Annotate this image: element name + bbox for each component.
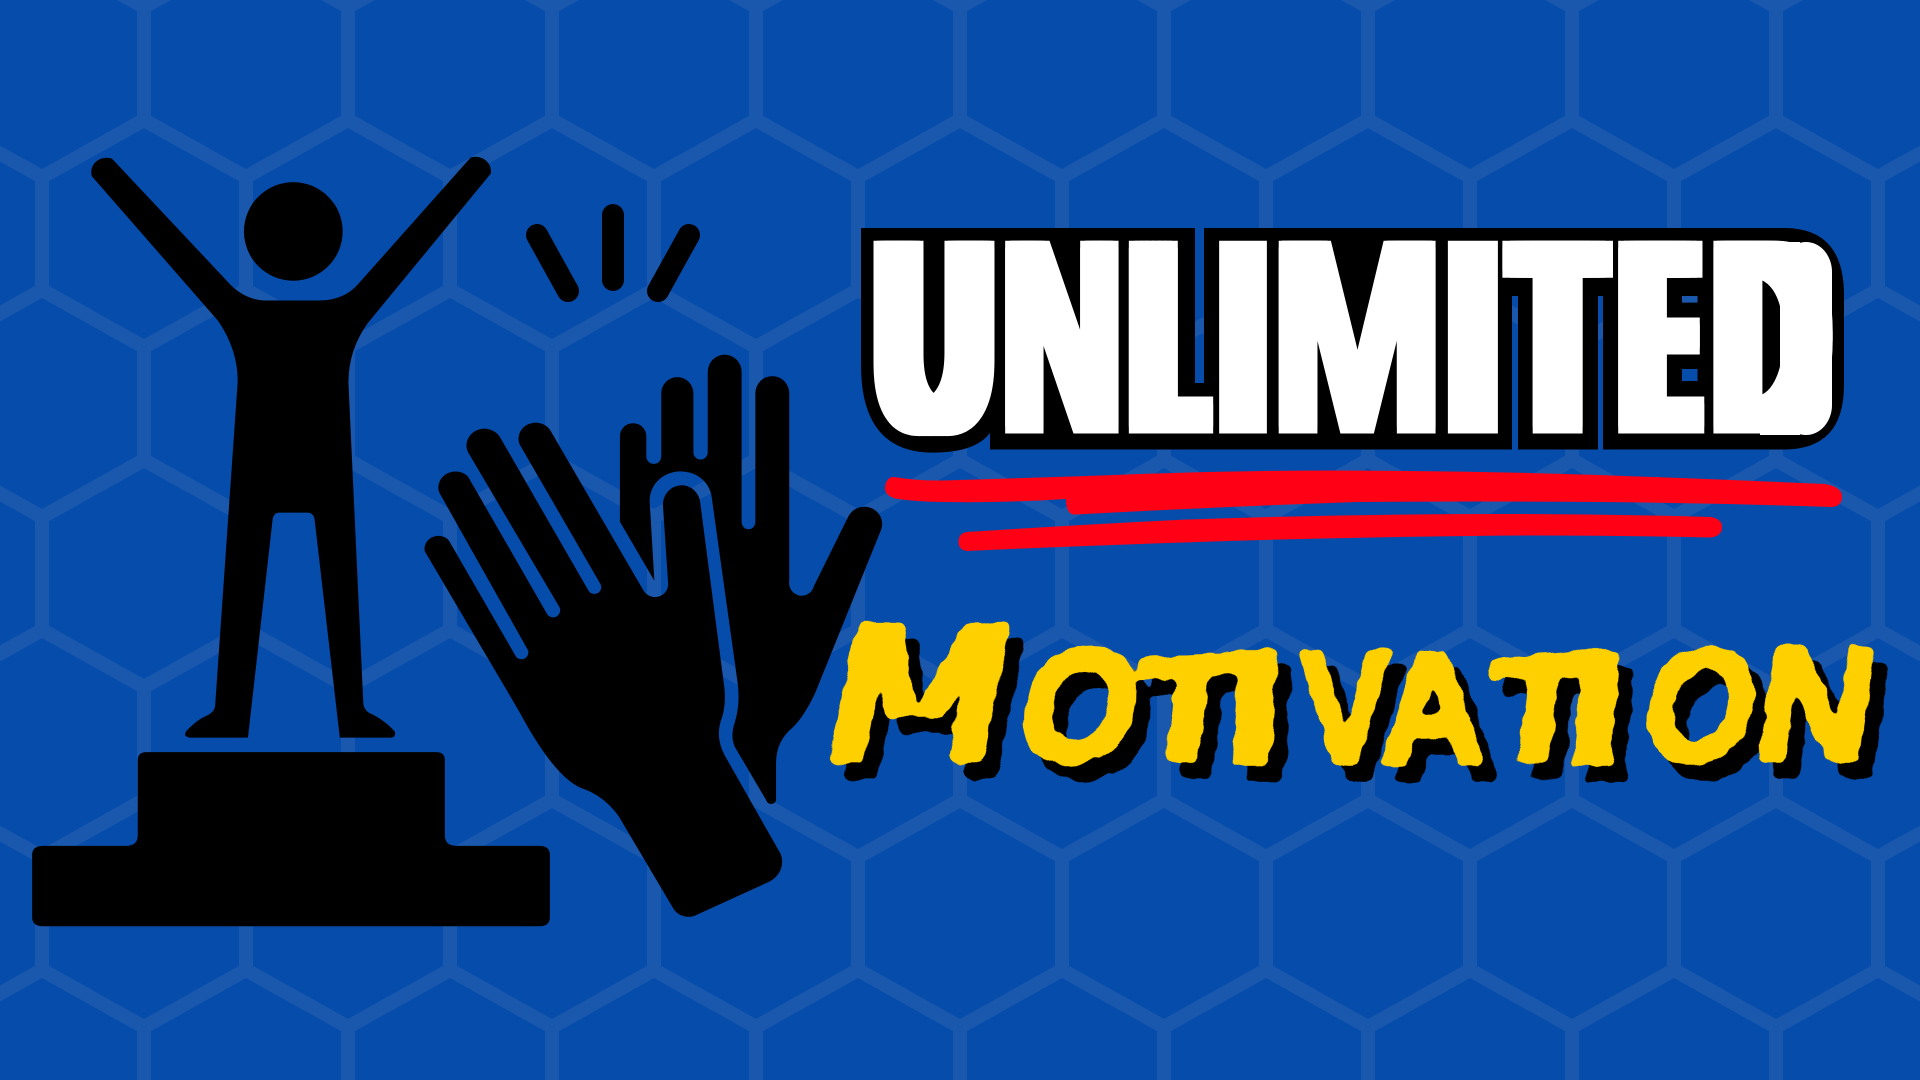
title: UNLIMITED [874, 187, 1833, 488]
subtitle: MOTIVATION: N [1746, 614, 1887, 793]
subtitle: MOTIVATION: O [1011, 613, 1150, 796]
subtitle drop shadow: A [1394, 634, 1499, 813]
subtitle: MOTIVATION: I [1562, 618, 1632, 797]
title: UNLIMITED: I [1432, 187, 1514, 488]
title: UNLIMITED: L [1140, 187, 1199, 488]
title: UNLIMITED: N [1003, 187, 1121, 488]
subtitle drop shadow [844, 629, 1901, 813]
subtitle: MOTIVATION: A [1380, 618, 1485, 797]
back hand [620, 355, 882, 804]
title backing: black outline plate [861, 228, 1844, 453]
subtitle drop shadow: T [1491, 638, 1617, 810]
subtitle drop shadow: M [825, 601, 1043, 815]
subtitle drop shadow: O [1025, 629, 1164, 812]
subtitle: MOTIVATION [830, 613, 1887, 797]
subtitle: MOTIVATION: V [1300, 618, 1389, 797]
title: UNLIMITED: D [1717, 187, 1825, 488]
subtitle drop shadow: N [1760, 630, 1901, 809]
title: UNLIMITED: M [1271, 187, 1443, 488]
front hand [424, 423, 782, 917]
subtitle drop shadow: T [1137, 638, 1267, 810]
icon: clapping hands [424, 355, 882, 917]
subtitle: MOTIVATION: M [811, 585, 1029, 799]
subtitle drop shadow: V [1314, 634, 1403, 813]
subtitle: MOTIVATION: O [1635, 613, 1767, 796]
person body [91, 157, 491, 738]
icon: person with raised arms on podium [32, 157, 550, 926]
subtitle: MOTIVATION: I [1220, 618, 1290, 797]
red underline bottom [958, 514, 1722, 551]
title: UNLIMITED: T [1516, 187, 1599, 488]
title: UNLIMITED: E [1630, 187, 1690, 488]
icon: clap motion lines [537, 215, 689, 291]
subtitle: MOTIVATION: T [1477, 622, 1603, 794]
subtitle: MOTIVATION: T [1123, 622, 1253, 794]
person head [244, 182, 343, 281]
title: UNLIMITED: U [878, 187, 990, 488]
subtitle drop shadow: I [1576, 634, 1646, 813]
subtitle drop shadow: O [1649, 629, 1781, 812]
podium [32, 752, 550, 926]
title: UNLIMITED: I [1204, 187, 1282, 488]
subtitle drop shadow: I [1234, 634, 1304, 813]
red underline top [885, 471, 1842, 515]
